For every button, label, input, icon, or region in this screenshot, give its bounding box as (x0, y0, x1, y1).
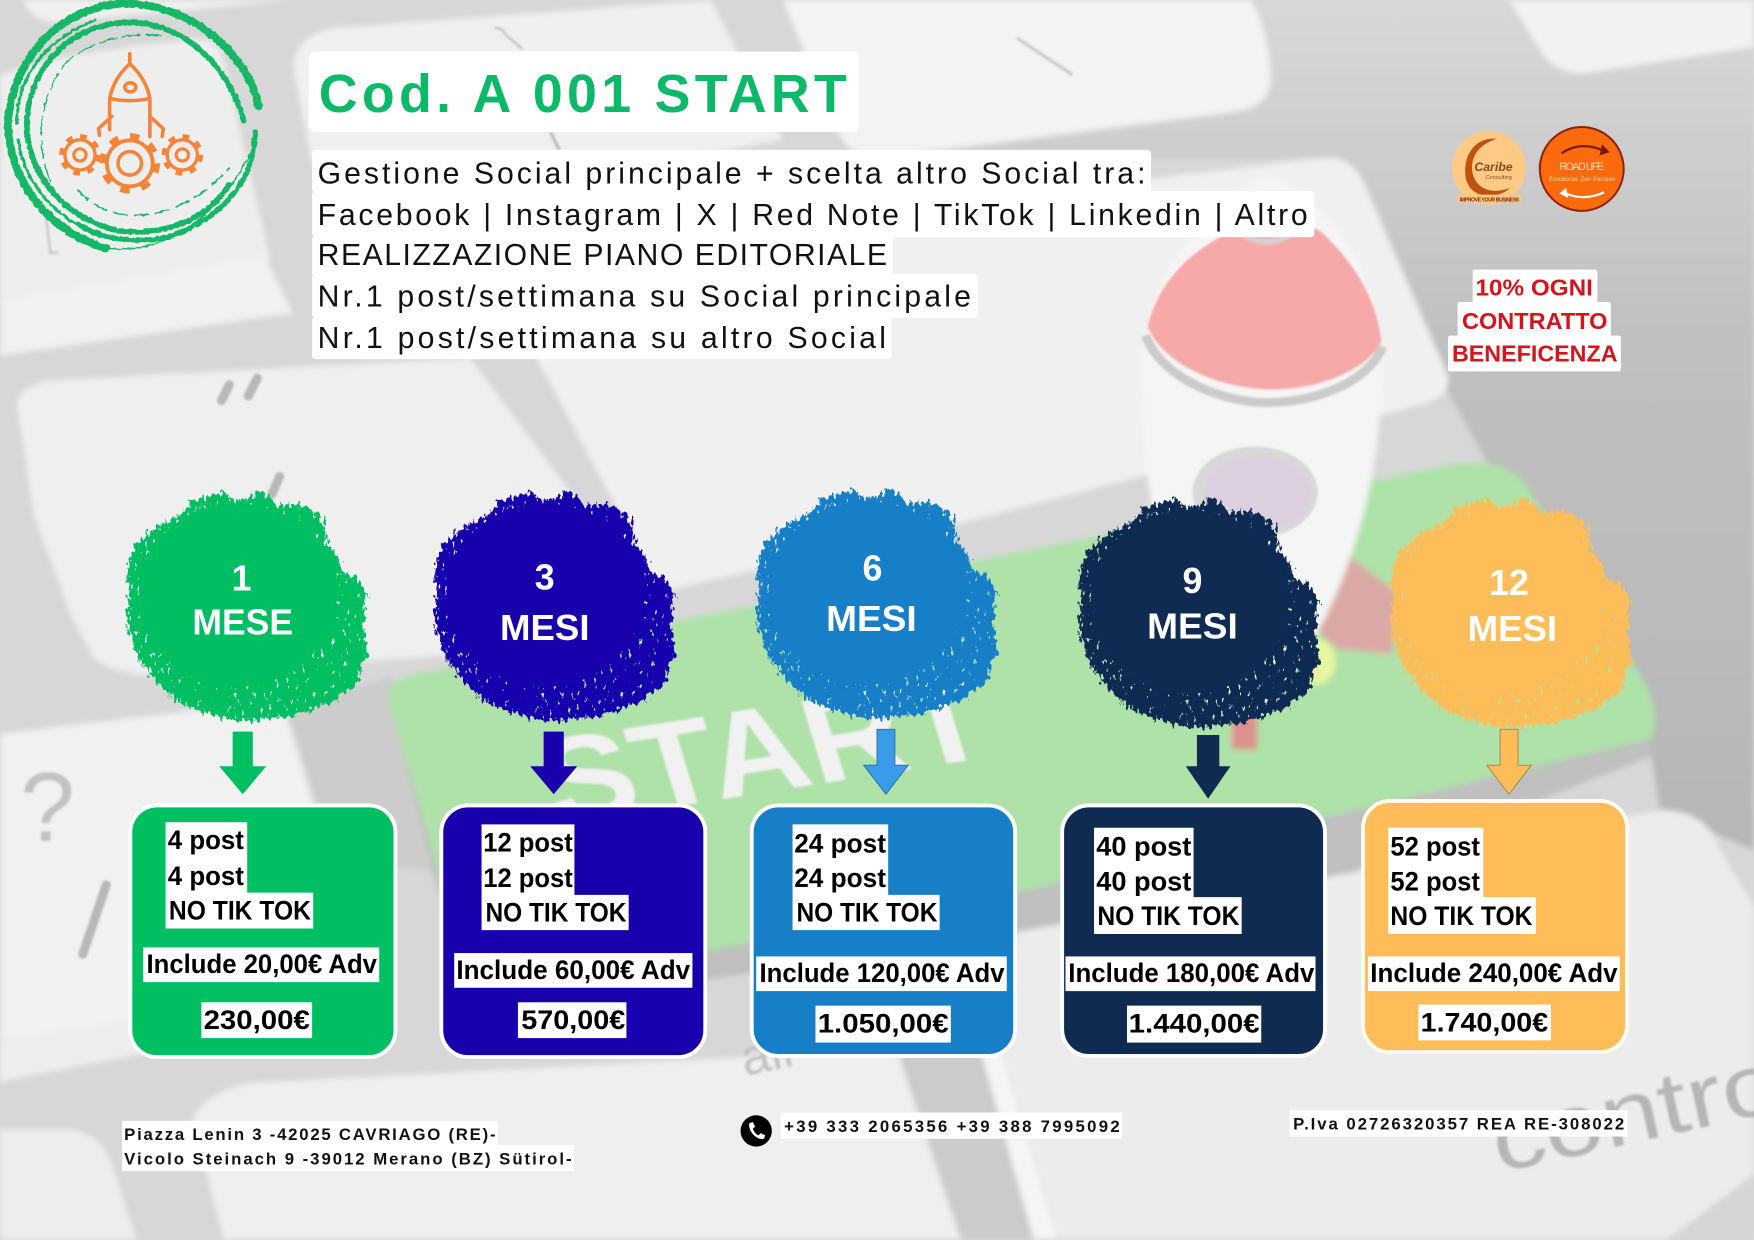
logo: Caribe Consulting: IMPROVE YOUR BUSINESS (1460, 197, 1520, 203)
rocket body (1142, 177, 1383, 716)
brush badge 12 mesi: MESI (1468, 609, 1557, 649)
arrow 3 mesi (530, 732, 577, 794)
price card 1 mese: Include 20,00€ Adv (147, 949, 377, 979)
plan column: 6 mesi (752, 489, 1015, 1056)
background key labels: contro (1482, 1033, 1754, 1191)
logo: Caribe Consulting (1452, 131, 1526, 205)
plan column: 12 mesi (1363, 498, 1631, 1052)
price card 6 mesi: 1.050,00€ (818, 1008, 949, 1038)
description text block: REALIZZAZIONE PIANO EDITORIALE (318, 239, 887, 272)
brush badge 9 mesi: MESI (1147, 607, 1238, 647)
footer: addresses: Piazza Lenin 3 -42025 CAVRIAGO (RE)- (124, 1125, 496, 1144)
arrow 6 mesi (864, 729, 908, 794)
rocket icon (98, 54, 163, 136)
price card 3 mesi: Include 60,00€ Adv (456, 955, 690, 985)
callout: 10% charity: BENEFICENZA (1452, 340, 1618, 366)
background key labels (20, 649, 1754, 1191)
callout: 10% charity: CONTRATTO (1462, 308, 1607, 334)
price card 3 mesi: 570,00€ (521, 1005, 625, 1035)
price card 1 mese: 4 post (168, 861, 244, 891)
price card 12 mesi: Include 240,00€ Adv (1370, 958, 1618, 988)
background key labels: all (735, 1019, 798, 1087)
arrow 12 mesi (1487, 729, 1531, 794)
plan column: 9 mesi (1062, 498, 1325, 1056)
price card 12 mesi: 1.740,00€ (1421, 1007, 1548, 1037)
brush badge 1 mese: 1 (232, 559, 252, 599)
brush badge 9 mesi: 9 (1182, 561, 1202, 601)
callout: 10% charity: 10% OGNI (1475, 274, 1593, 300)
title: Cod. A 001 START (319, 64, 847, 124)
gears icon (62, 136, 201, 191)
footer: addresses: Vicolo Steinach 9 -39012 Merano (BZ) Sütirol- (124, 1149, 572, 1168)
price card 6 mesi: 24 post (794, 828, 886, 858)
price card 6 mesi (752, 805, 1015, 1056)
footer: phone numbers: +39 333 2065356 +39 388 7995092 (784, 1117, 1120, 1136)
price card 1 mese: 4 post (168, 825, 244, 855)
rocket rear fin (1313, 554, 1397, 654)
description text block: Nr.1 post/settimana su altro Social (318, 322, 886, 355)
price card 9 mesi: 40 post (1096, 832, 1191, 862)
brush badge 3 mesi: MESI (500, 608, 590, 648)
arrow 1 mese (219, 732, 266, 794)
brush badge 3 mesi: 3 (535, 558, 555, 598)
price card 3 mesi: 12 post (483, 863, 573, 893)
brush badge 6 mesi (756, 489, 997, 719)
price card 1 mese: 230,00€ (204, 1005, 310, 1035)
description text block: Gestione Social principale + scelta altro Social tra: (318, 157, 1145, 190)
price card 3 mesi (441, 805, 705, 1057)
brush badge 9 mesi (1078, 498, 1319, 728)
price card 9 mesi: NO TIK TOK (1097, 901, 1240, 931)
brush badge 12 mesi (1390, 498, 1631, 728)
price card 12 mesi: NO TIK TOK (1390, 901, 1533, 931)
start key (388, 699, 1651, 1012)
price card 9 mesi (1062, 805, 1325, 1056)
price card 12 mesi: 52 post (1390, 866, 1480, 896)
callout: 10% charity (1448, 270, 1621, 371)
plan column: 3 mesi (434, 491, 705, 1057)
logo: Road Life: ROAD LIFE (1559, 161, 1604, 173)
brush badge 6 mesi: MESI (826, 599, 917, 639)
description text block: Nr.1 post/settimana su Social principale (318, 281, 971, 314)
brush badge 1 mese (126, 491, 367, 722)
arrow 9 mesi (1186, 735, 1230, 799)
footer: VAT number: P.Iva 02726320357 REA RE-308022 (1293, 1114, 1624, 1133)
price card 6 mesi: 24 post (794, 863, 886, 893)
footer: addresses (122, 1121, 574, 1171)
logo: Caribe Consulting: Consulting (1486, 175, 1512, 181)
background key labels: ? (20, 752, 75, 862)
background key labels: START (523, 649, 1006, 851)
price card 6 mesi: Include 120,00€ Adv (760, 958, 1005, 988)
price card 9 mesi: Include 180,00€ Adv (1068, 958, 1314, 988)
description text block (312, 150, 1314, 359)
brush badge 1 mese: MESE (192, 602, 293, 642)
price card 1 mese (130, 805, 395, 1057)
logo: Road Life (1540, 127, 1624, 211)
price card 12 mesi: 52 post (1390, 832, 1480, 862)
price card 9 mesi: 40 post (1096, 866, 1191, 896)
description text block: Facebook | Instagram | X | Red Note | TikTok | Linkedin | Altro (318, 199, 1308, 232)
brush badge 6 mesi: 6 (863, 549, 882, 589)
brush badge 12 mesi: 12 (1489, 563, 1529, 603)
price card 9 mesi: 1.440,00€ (1129, 1008, 1260, 1038)
logo: Road Life: Emotional, Zen Passion (1549, 176, 1616, 183)
icon: phone (741, 1115, 772, 1147)
price card 3 mesi: 12 post (483, 827, 573, 857)
price card 1 mese: NO TIK TOK (169, 896, 312, 926)
brush badge 3 mesi (434, 491, 675, 722)
price card 6 mesi: NO TIK TOK (796, 898, 938, 928)
price card 3 mesi: NO TIK TOK (485, 898, 627, 928)
price card 12 mesi (1363, 801, 1627, 1052)
plan column: 1 mese (126, 491, 395, 1057)
logo: rocket and gears in green ring (8, 3, 258, 249)
logo: Caribe Consulting: Caribe (1474, 160, 1513, 174)
green brush ring (8, 3, 258, 249)
